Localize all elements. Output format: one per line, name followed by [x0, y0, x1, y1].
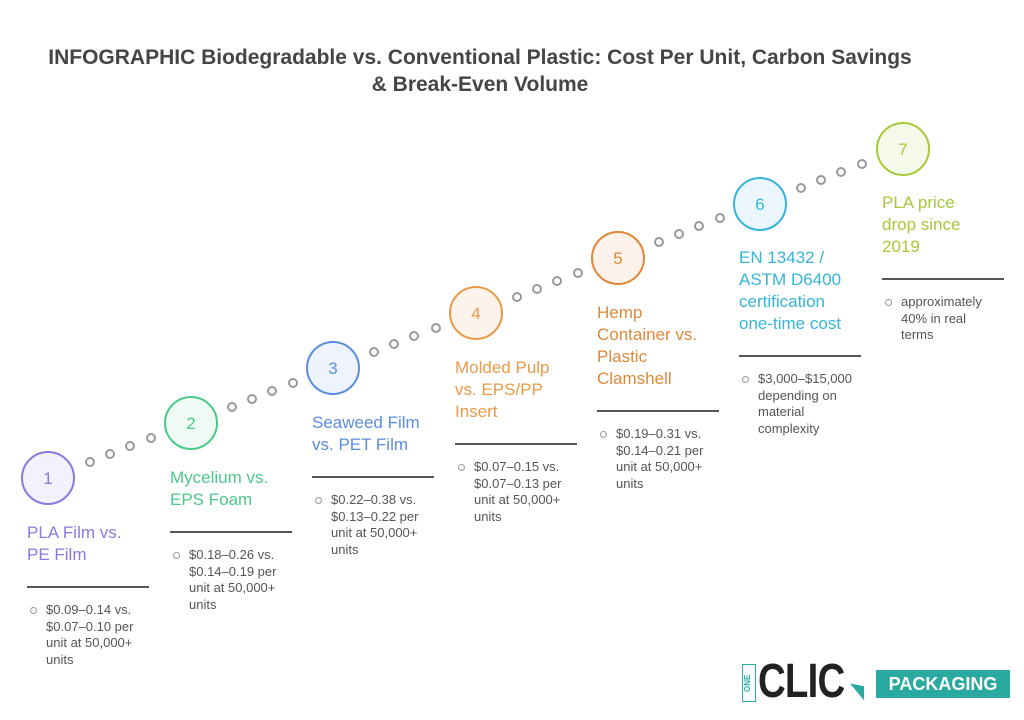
item 6: certification	[739, 292, 825, 311]
timeline circles and dots: 7	[898, 140, 908, 159]
logo: ONE	[743, 674, 752, 692]
item 5: Plastic	[597, 347, 647, 366]
item 6	[739, 248, 861, 436]
timeline circles and dots: 3	[328, 359, 338, 378]
item 4: $0.07–0.15 vs. $0.07–0.13 per unit at 50,000+ units	[474, 459, 561, 524]
title: & Break-Even Volume	[372, 73, 588, 96]
item 5	[597, 303, 719, 490]
item 3	[312, 413, 434, 556]
item 3: vs. PET Film	[312, 435, 408, 454]
item 7: PLA price	[882, 193, 955, 212]
item 4: Insert	[455, 402, 498, 421]
item 3: $0.22–0.38 vs. $0.13–0.22 per unit at 50,000+ units	[331, 492, 418, 556]
item 6: EN 13432 /	[739, 248, 824, 267]
item 5: Container vs.	[597, 325, 697, 344]
item 5: Hemp	[597, 303, 642, 322]
item 6: one-time cost	[739, 314, 841, 333]
item 2: Mycelium vs.	[170, 468, 268, 487]
item 7	[882, 193, 1004, 342]
title	[48, 46, 912, 96]
item 6: ASTM D6400	[739, 270, 841, 289]
item 1	[27, 523, 149, 666]
item 1: $0.09–0.14 vs. $0.07–0.10 per unit at 50,000+ units	[46, 602, 133, 666]
item 7: approximately 40% in real terms	[901, 294, 982, 342]
timeline circles and dots: 1	[43, 469, 53, 488]
item 4: Molded Pulp	[455, 358, 550, 377]
item 3: Seaweed Film	[312, 413, 420, 432]
logo: PACKAGING	[889, 674, 997, 694]
item 7: 2019	[882, 237, 920, 256]
item 6: $3,000–$15,000 depending on material complexity	[758, 371, 852, 436]
timeline circles and dots: 2	[186, 414, 196, 433]
logo: CLIC	[758, 655, 844, 708]
item 7: drop since	[882, 215, 960, 234]
timeline circles and dots: 5	[613, 249, 623, 268]
item 1: PLA Film vs.	[27, 523, 121, 542]
item 4	[455, 358, 577, 524]
item 4: vs. EPS/PP	[455, 380, 543, 399]
item 2	[170, 468, 292, 612]
logo	[742, 655, 1010, 708]
item 5: $0.19–0.31 vs. $0.14–0.21 per unit at 50,000+ units	[616, 426, 703, 490]
item 5: Clamshell	[597, 369, 672, 388]
item 1: PE Film	[27, 545, 86, 564]
title: INFOGRAPHIC Biodegradable vs. Conventional Plastic: Cost Per Unit, Carbon Savings	[48, 46, 912, 69]
item 2: $0.18–0.26 vs. $0.14–0.19 per unit at 50,000+ units	[189, 547, 276, 612]
item 2: EPS Foam	[170, 490, 252, 509]
timeline circles and dots: 6	[755, 195, 765, 214]
timeline circles and dots: 4	[471, 304, 481, 323]
